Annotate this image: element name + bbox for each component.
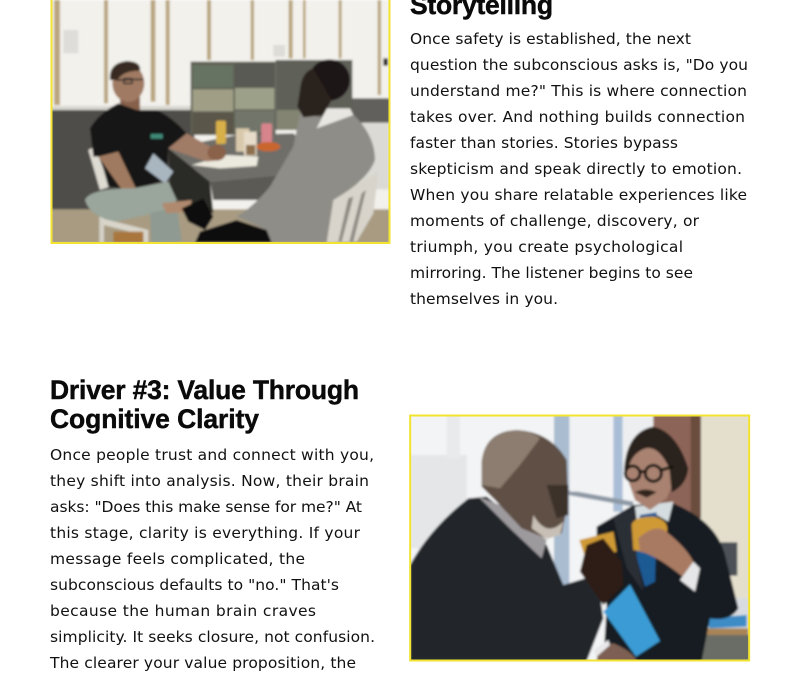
text block: driver 3 body: they shift into analysis. Now, their brain [50, 472, 369, 490]
text block: driver 2 body: triumph, you create psychological [410, 238, 683, 256]
photo: two men talking at a table [51, 0, 390, 243]
text block: driver 3 body: simplicity. It seeks closure, not confusion. [50, 628, 375, 646]
right man [597, 503, 738, 661]
cabinet [191, 62, 276, 135]
heading: driver 3 [50, 375, 359, 434]
text block: driver 2 body: mirroring. The listener begins to see [410, 264, 693, 282]
text block: driver 2 body: takes over. And nothing builds connection [410, 108, 745, 126]
heading: driver 3: Driver #3: Value Through [50, 375, 359, 405]
text block: driver 2 body [410, 30, 748, 308]
heading: driver 3: Cognitive Clarity [50, 404, 259, 434]
text block: driver 2 body: understand me?" This is where connection [410, 82, 747, 100]
text block: driver 3 body: subconscious defaults to "no." That's [50, 576, 339, 594]
text block: driver 2 body: question the subconscious asks is, "Do you [410, 56, 748, 74]
right man [237, 112, 375, 243]
photo: two businessmen with coffee mugs [410, 415, 750, 661]
text block: driver 3 body: this stage, clarity is everything. If your [50, 524, 361, 542]
text block: driver 2 body: faster than stories. Stories bypass [410, 134, 678, 152]
text block: driver 3 body: asks: "Does this make sense for me?" At [50, 498, 362, 516]
text block: driver 2 body: moments of challenge, discovery, or [410, 212, 700, 230]
table items [216, 121, 226, 144]
folder [603, 584, 660, 657]
left man [410, 497, 603, 661]
right man chair [327, 172, 378, 243]
text block: driver 2 body: themselves in you. [410, 290, 558, 308]
table [168, 133, 303, 182]
text block: driver 3 body [49, 446, 375, 672]
text block: driver 3 body: The clearer your value proposition, the [49, 654, 356, 672]
text block: driver 2 body: skepticism and speak directly to emotion. [410, 160, 742, 178]
text block: driver 3 body: message feels complicated, the [50, 550, 305, 568]
text block: driver 3 body: because the human brain craves [50, 602, 316, 620]
left man [120, 95, 140, 110]
text block: driver 3 body: Once people trust and connect with you, [50, 446, 374, 464]
text block: driver 2 body: Once safety is established, the next [410, 30, 691, 48]
mug and hand [579, 532, 617, 562]
left man chair [88, 147, 110, 190]
text block: driver 2 body: When you share relatable experiences like [410, 186, 747, 204]
